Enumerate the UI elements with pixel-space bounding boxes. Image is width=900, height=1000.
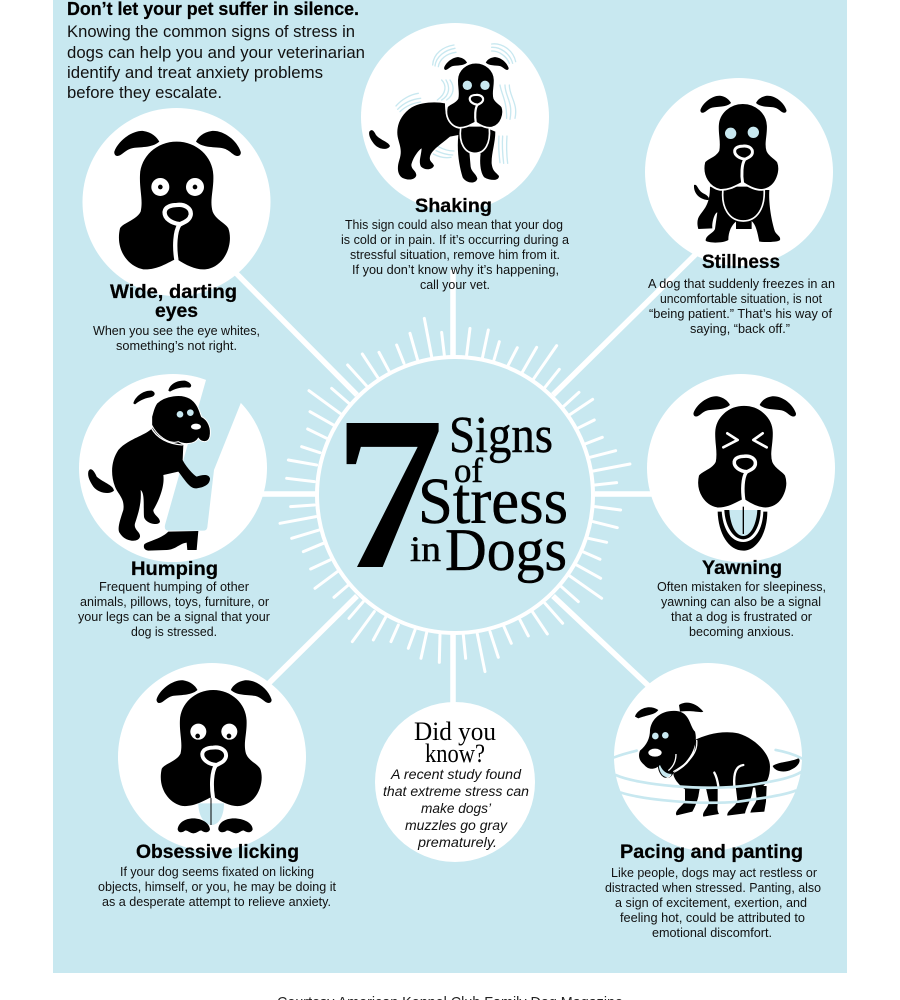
intro text — [67, 0, 365, 102]
description: animals, pillows, toys, furniture, or — [80, 595, 269, 609]
title: 7 Signs of Stress in Dogs: Dogs — [445, 517, 567, 583]
icon: still dog — [694, 96, 786, 243]
icon: humping dog with leg and shoe — [88, 370, 247, 551]
description: A dog that suddenly freezes in an — [648, 277, 835, 291]
icon: yawning dog — [693, 396, 796, 551]
description: your legs can be a signal that your — [78, 610, 270, 624]
heading: Yawning — [702, 557, 782, 579]
description: call your vet. — [420, 278, 490, 292]
description — [383, 767, 529, 850]
description — [98, 865, 337, 909]
description: “being patient.” That’s his way of — [649, 307, 833, 321]
description: Often mistaken for sleepiness, — [657, 580, 826, 594]
description: If you don’t know why it’s happening, — [352, 263, 559, 277]
panel: shaking — [341, 23, 569, 292]
description: make dogs’ — [421, 801, 492, 816]
description — [341, 218, 569, 292]
description: becoming anxious. — [689, 625, 794, 639]
panel: obsessive licking — [98, 663, 337, 909]
heading — [414, 717, 496, 768]
panel: yawning — [647, 374, 835, 639]
title: 7 Signs of Stress in Dogs: in — [410, 529, 441, 569]
description: uncomfortable situation, is not — [660, 292, 823, 306]
description: emotional discomfort. — [652, 926, 772, 940]
description: dog is stressed. — [131, 625, 217, 639]
title: 7 Signs of Stress in Dogs: Signs — [449, 407, 553, 464]
description: saying, “back off.” — [690, 322, 790, 336]
title: 7 Signs of Stress in Dogs: of — [454, 451, 483, 490]
description: something’s not right. — [116, 339, 237, 353]
heading: Did you — [414, 717, 496, 746]
panel: wide, darting eyes — [82, 108, 270, 353]
icon: shaking dog — [369, 44, 516, 182]
description: A recent study found — [390, 767, 522, 782]
description: When you see the eye whites, — [93, 324, 260, 338]
description: stressful situation, remove him from it. — [350, 248, 560, 262]
heading: eyes — [155, 300, 198, 322]
description: objects, himself, or you, he may be doing it — [98, 880, 337, 894]
description: Like people, dogs may act restless or — [611, 866, 817, 880]
description: that a dog is frustrated or — [671, 610, 812, 624]
description: prematurely. — [417, 835, 497, 850]
description: distracted when stressed. Panting, also — [605, 881, 821, 895]
description: muzzles go gray — [405, 818, 508, 833]
description: feeling hot, could be attributed to — [620, 911, 805, 925]
heading: Shaking — [415, 195, 492, 217]
icon: pacing dog with motion rings — [614, 703, 802, 817]
heading: know? — [425, 739, 485, 768]
description — [657, 580, 826, 639]
description: yawning can also be a signal — [661, 595, 821, 609]
icon: dog with wide eyes — [114, 131, 241, 269]
heading: Obsessive licking — [136, 841, 299, 863]
intro text: dogs can help you and your veterinarian — [67, 44, 365, 62]
heading: Humping — [131, 558, 218, 580]
intro text: Knowing the common signs of stress in — [67, 23, 355, 41]
description: as a desperate attempt to relieve anxiety. — [102, 895, 331, 909]
heading — [110, 281, 237, 322]
icon: licking dog — [157, 680, 272, 833]
intro text: before they escalate. — [67, 84, 222, 102]
title: 7 Signs of Stress in Dogs: 7 — [334, 371, 444, 615]
title: 7 Signs of Stress in Dogs — [334, 371, 568, 615]
sunburst rays around the title — [225, 250, 700, 720]
description: that extreme stress can — [383, 784, 529, 799]
panel: pacing and panting — [605, 663, 821, 940]
panel: humping — [78, 370, 270, 639]
heading: Wide, darting — [110, 281, 237, 303]
description: is cold or in pain. If it’s occurring during a — [341, 233, 569, 247]
description — [605, 866, 821, 940]
description: Frequent humping of other — [99, 580, 249, 594]
description — [93, 324, 260, 353]
heading: Pacing and panting — [620, 841, 803, 863]
intro text: identify and treat anxiety problems — [67, 64, 323, 82]
description: This sign could also mean that your dog — [345, 218, 563, 232]
description — [648, 277, 835, 336]
heading: Stillness — [702, 251, 780, 273]
panel: stillness — [645, 78, 835, 336]
panel: did you know — [375, 702, 535, 862]
description — [78, 580, 270, 639]
description: a sign of excitement, exertion, and — [615, 896, 807, 910]
description: If your dog seems fixated on licking — [120, 865, 314, 879]
title: 7 Signs of Stress in Dogs: Stress — [418, 465, 568, 538]
